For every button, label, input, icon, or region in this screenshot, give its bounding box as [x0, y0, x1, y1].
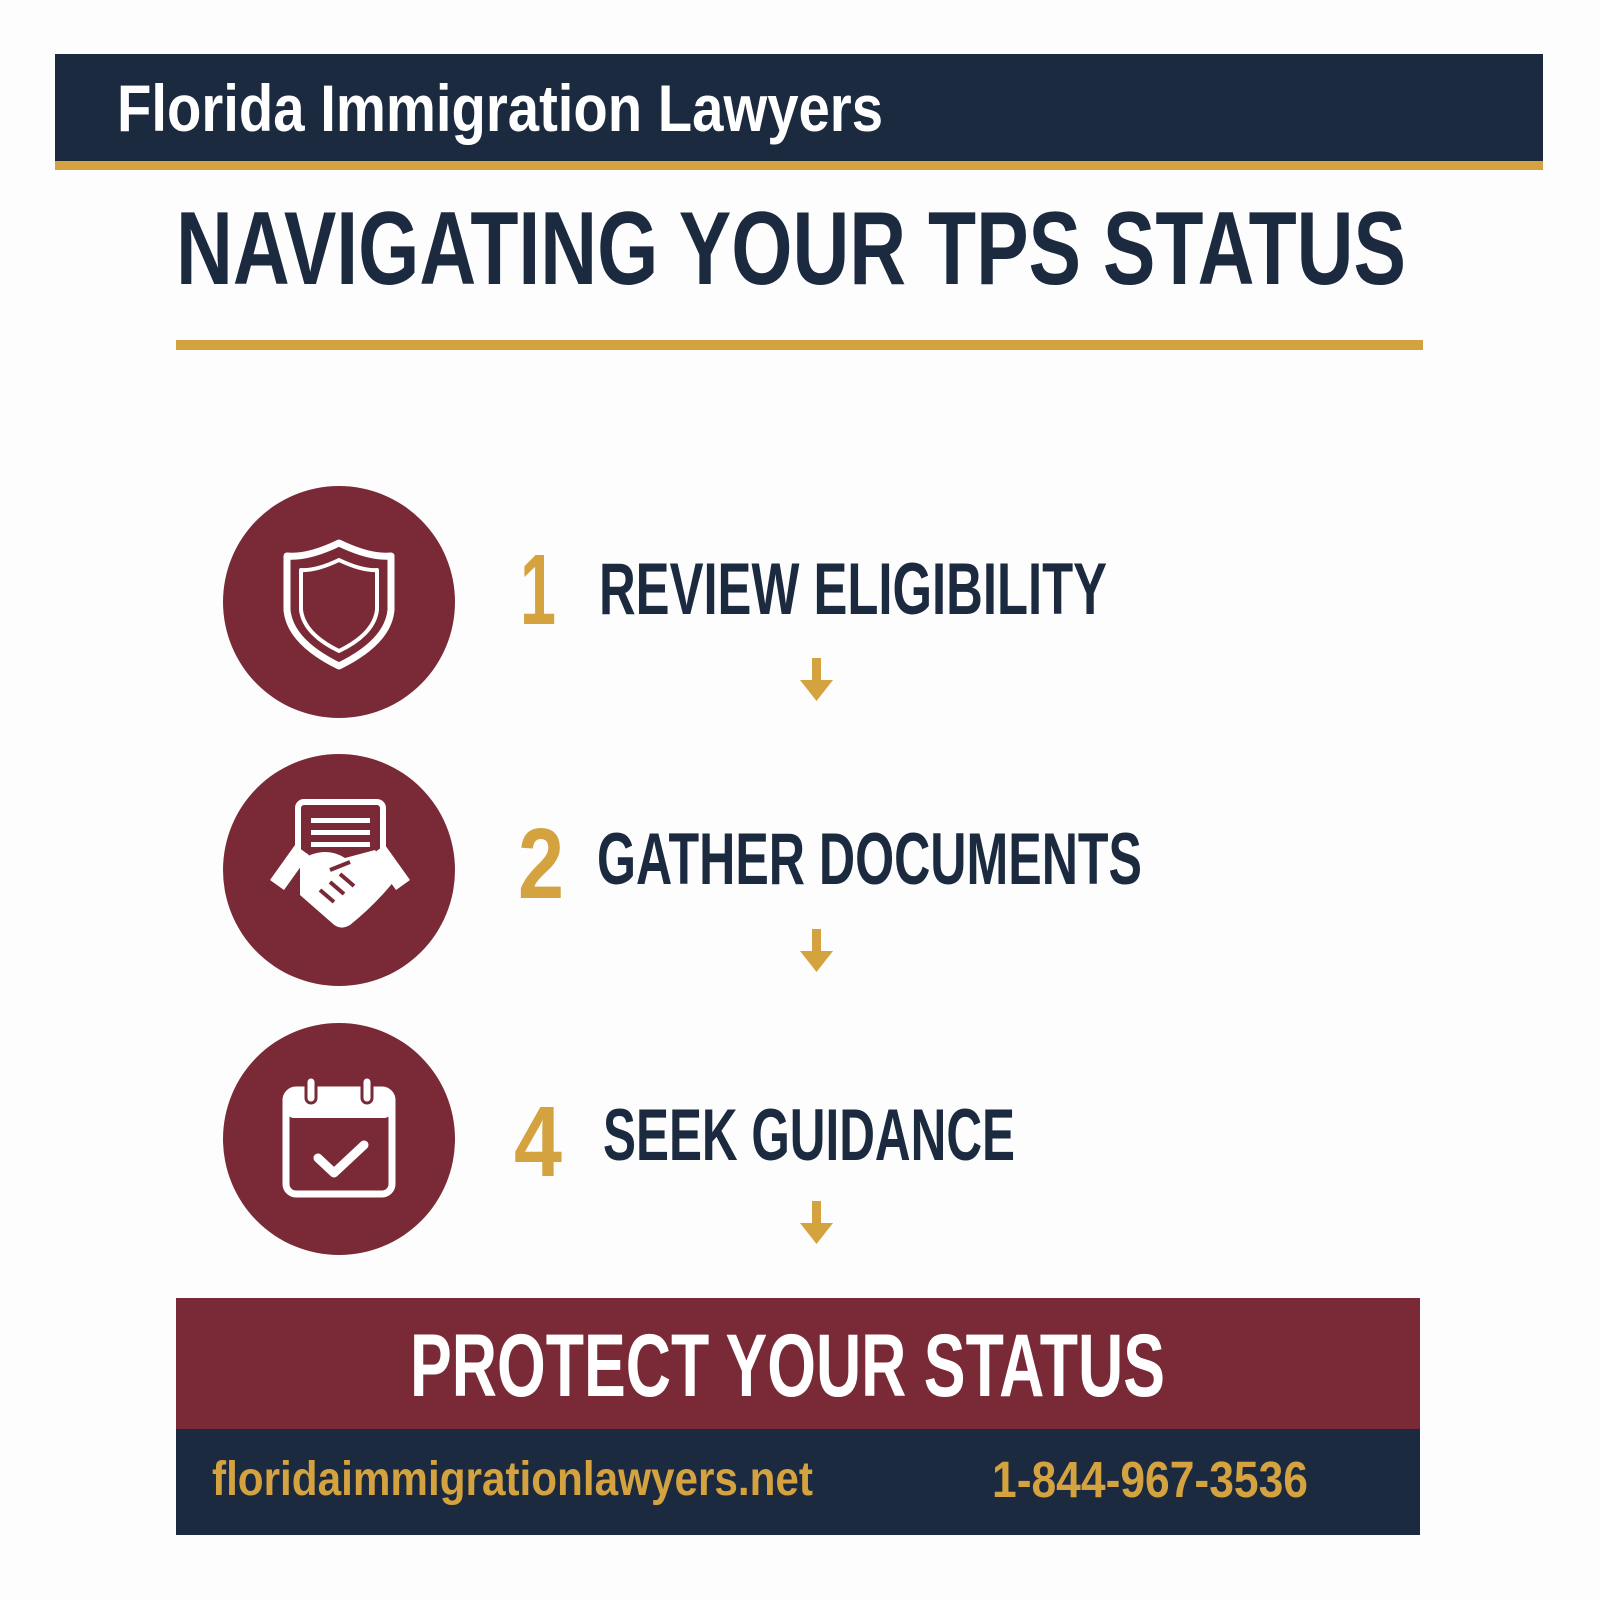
footer contact bar [176, 1429, 1420, 1535]
number 4: 4 [514, 1086, 562, 1198]
step text: GATHER DOCUMENTS [597, 819, 1142, 900]
number 2: 2 [518, 808, 564, 920]
arrow [800, 1201, 833, 1244]
phone: 1-844-967-3536 [992, 1451, 1308, 1508]
step 2 [223, 754, 1142, 986]
icon: documents handshake [223, 754, 455, 986]
banner: protect your status [176, 1298, 1420, 1430]
banner: protect your status: PROTECT YOUR STATUS [410, 1315, 1165, 1415]
icon: shield [223, 486, 455, 718]
step 3 [223, 1023, 1015, 1255]
header bar [55, 54, 1543, 170]
step text: REVIEW ELIGIBILITY [599, 549, 1107, 630]
step text: SEEK GUIDANCE [603, 1095, 1015, 1176]
icon: calendar [223, 1023, 455, 1255]
number 1: 1 [520, 534, 556, 646]
arrow [800, 658, 833, 701]
title underline [176, 340, 1423, 350]
header text: Florida Immigration Lawyers [117, 71, 883, 145]
step 1 [223, 486, 1107, 718]
arrow [800, 929, 833, 972]
website: floridaimmigrationlawyers.net [212, 1453, 813, 1506]
